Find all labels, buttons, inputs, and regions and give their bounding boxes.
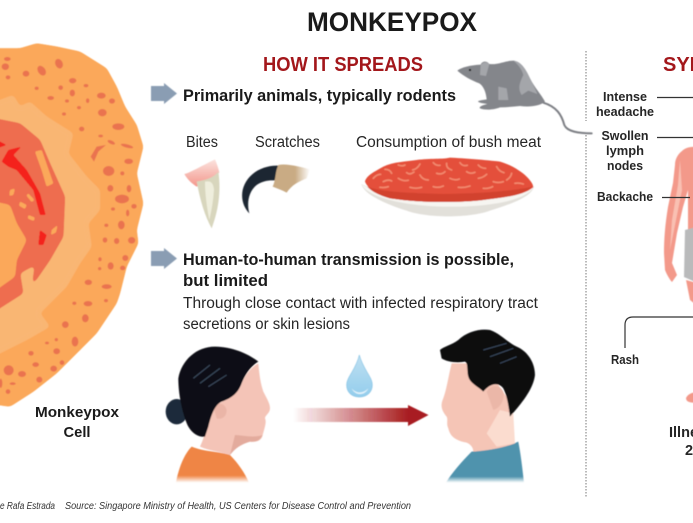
illustration: woman	[166, 347, 270, 483]
panel: animal transmission routes	[184, 134, 542, 228]
panel: symptoms: lymph	[606, 143, 644, 158]
icon: plate of bush meat	[361, 158, 534, 216]
heading: how it spreads: HOW IT SPREADS	[263, 54, 423, 76]
heading: primarily animals: Primarily animals, typically rodents	[183, 86, 456, 105]
title: MONKEYPOX	[307, 7, 477, 37]
divider	[585, 51, 587, 497]
illustration: body	[664, 147, 693, 403]
icon: rat	[457, 61, 592, 133]
illustration: man	[440, 330, 535, 483]
panel: symptoms	[596, 54, 693, 459]
label: consumption of bush meat: Consumption of bush meat	[356, 134, 542, 151]
cell illustration	[0, 43, 143, 407]
panel: monkeypox cell: Cell	[64, 424, 90, 441]
arrow: transmission	[293, 405, 428, 426]
heading: human-to-human: Human-to-human transmission is possible,	[183, 251, 514, 269]
label: bites: Bites	[186, 134, 218, 151]
panel: symptoms: headache	[596, 104, 654, 119]
panel: monkeypox cell	[0, 43, 143, 441]
text block: human-to-human transmission: but limited	[183, 272, 268, 290]
icon: tooth	[184, 159, 219, 228]
leader lines	[625, 98, 693, 348]
source line: Source: Singapore Ministry of Health, US Centers for Disease Control and Prevention	[65, 500, 411, 512]
label: scratches: Scratches	[255, 134, 320, 151]
text block: human-to-human transmission	[183, 251, 539, 333]
icon: claw	[242, 165, 310, 213]
label: rash: Rash	[611, 352, 639, 367]
description: Through close contact with infected respiratory tract	[183, 295, 539, 312]
panel: symptoms: nodes	[607, 158, 643, 173]
label: intense headache: Intense	[603, 89, 647, 104]
credit: e Rafa Estrada	[0, 501, 55, 512]
text block: human-to-human transmission: secretions or skin lesions	[183, 316, 350, 333]
arrow: human bullet	[151, 248, 177, 269]
cell label: Monkeypox	[35, 404, 120, 421]
label: swollen lymph nodes: Swollen	[602, 128, 649, 143]
label: backache: Backache	[597, 189, 653, 204]
arrow: animals bullet	[151, 83, 177, 104]
icon: water drop	[347, 355, 372, 397]
